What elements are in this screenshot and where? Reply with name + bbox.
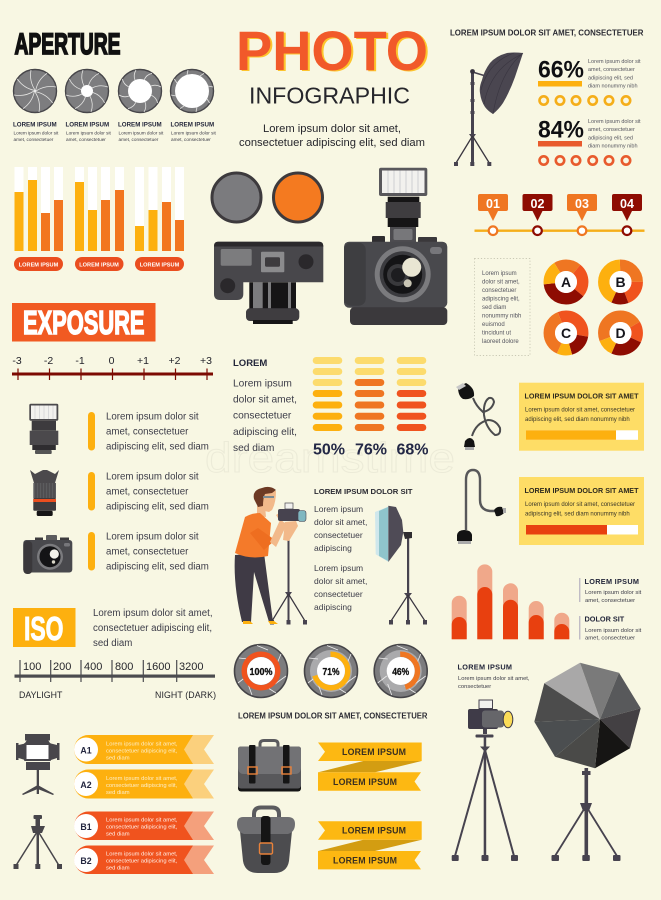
text: exposure item 1: Lorem ipsum dolor sit [106, 412, 199, 422]
text box: dotted: Lorem ipsum [482, 271, 517, 277]
text: photographer: consectetuer [314, 530, 363, 540]
aperture 2 [66, 70, 108, 112]
text: bottom right: consectetuer [458, 684, 491, 690]
text: lorem block: sed diam [233, 443, 274, 454]
aperture captions [13, 122, 217, 142]
text: photographer: LOREM IPSUM DOLOR SIT [314, 487, 413, 496]
tripod [270, 522, 307, 624]
stat: 84 percent [538, 116, 641, 165]
text: exposure item 3: amet, consectetuer [106, 546, 189, 558]
ribbon 1: LOREM IPSUM [342, 747, 406, 757]
text box: dotted: adipiscing elit, [482, 296, 520, 302]
bar chart labels: LOREM IPSUM [19, 262, 59, 268]
text: photographer: dolor sit amet, [314, 576, 367, 586]
icon: camera front view with flash [344, 168, 447, 325]
option A1: Lorem ipsum dolor sit amet, [106, 742, 178, 748]
stat: 84 percent: Lorem ipsum dolor sit [588, 119, 641, 125]
text: exposure item 3 [88, 532, 209, 572]
text: exposure item 2: Lorem ipsum dolor sit [106, 472, 199, 482]
stat: 66 percent: adipiscing elit, sed [588, 76, 633, 82]
stat: 84 percent: amet, consectetuer [588, 127, 635, 133]
card: yellow 1: LOREM IPSUM DOLOR SIT AMET [524, 392, 639, 400]
gauge 100 percent [234, 644, 288, 698]
card: yellow 2: adipiscing elit, sed diam nonummy nibh [525, 512, 630, 518]
donut chart B: B [615, 274, 626, 290]
text box: dotted: dolor sit amet, [482, 280, 520, 286]
donut chart C [549, 316, 583, 350]
pin 01: 01 [486, 197, 500, 211]
legend: columns: amet, consectetuer [585, 636, 635, 642]
exposure scale: -1 [75, 355, 85, 367]
text: lorem block: adipiscing elit, [233, 427, 297, 438]
ribbon 2: LOREM IPSUM [333, 856, 397, 866]
icon: small camera [23, 535, 72, 574]
camera [285, 503, 293, 509]
aperture 4 [170, 70, 214, 112]
bar chart: rounded columns [452, 564, 569, 639]
intro text [239, 123, 425, 149]
legend: columns: Lorem ipsum dolor sit [585, 590, 642, 596]
icon: softbox on stand [375, 506, 427, 624]
donut chart D: D [615, 325, 626, 341]
option A1: consectetuer adipiscing elit, [106, 748, 178, 754]
text box: dotted: tincidunt ut [482, 331, 511, 337]
stat: 66 percent [538, 56, 641, 105]
icon: orange filter [274, 173, 322, 222]
option B2: B2 [80, 856, 92, 866]
stat: 66 percent: 66% [538, 56, 584, 84]
pin 04 [612, 194, 642, 235]
ISO scale: 3200 [179, 661, 203, 673]
title: photo: PHOTO [238, 20, 430, 83]
stacked pill chart: 50% [313, 442, 345, 458]
icon: flash unit [29, 404, 58, 454]
legend: columns: Lorem ipsum dolor sit [585, 628, 642, 634]
text box: dotted [474, 258, 530, 356]
text: photographer: Lorem ipsum [314, 563, 363, 573]
text: lorem block [233, 358, 297, 454]
option A1: sed diam [106, 756, 130, 762]
icon: octagon softbox on stand [534, 663, 641, 861]
icon: umbrella light stand [454, 52, 523, 166]
rating rings: red [540, 156, 630, 165]
bar chart labels: LOREM IPSUM [140, 262, 180, 268]
text: photographer: dolor sit amet, [314, 517, 367, 527]
pin 02 [522, 194, 552, 235]
legend: columns: LOREM IPSUM [584, 577, 639, 586]
card: yellow 2 [519, 477, 644, 545]
ISO scale: 400 [84, 661, 102, 673]
text: exposure item 2: adipiscing elit, sed diam [106, 502, 209, 512]
subtitle: infographic: INFOGRAPHIC [249, 82, 410, 108]
option A2: consectetuer adipiscing elit, [106, 783, 178, 789]
exposure scale: -2 [44, 355, 53, 367]
text: photographer: adipiscing [314, 543, 352, 553]
donut chart A: A [561, 274, 571, 290]
donut chart B [604, 265, 637, 299]
aperture captions: Lorem ipsum dolor sit [118, 130, 164, 136]
text box: dotted: laoreet dolore [482, 339, 519, 345]
ISO text: Lorem ipsum dolor sit amet, [93, 608, 213, 619]
stacked pill chart [313, 357, 429, 458]
exposure scale: +3 [200, 355, 212, 367]
text: photographer [314, 487, 413, 612]
card: yellow 1: adipiscing elit, sed diam nonummy nibh [525, 417, 630, 423]
gauge 46 percent [374, 644, 427, 698]
text: lorem block: consectetuer [233, 410, 292, 422]
donut chart D [604, 316, 637, 350]
ISO text: sed diam [93, 638, 132, 649]
ISO scale: 200 [53, 661, 71, 673]
pin 04: 04 [620, 197, 634, 211]
gauge 46 percent: 46% [392, 666, 410, 678]
aperture captions: LOREM IPSUM [170, 122, 214, 128]
text: exposure item 2 [88, 472, 209, 512]
ribbon 2 [318, 821, 422, 869]
aperture captions: Lorem ipsum dolor sit [14, 130, 59, 136]
text box: dotted: consectetuer [482, 288, 516, 294]
option A2: Lorem ipsum dolor sit amet, [106, 776, 178, 782]
neck [257, 506, 266, 517]
bar chart: three groups [14, 167, 184, 271]
text: photographer: consectetuer [314, 589, 363, 599]
aperture captions: amet, consectetuer [14, 137, 54, 142]
option A1: A1 [80, 746, 92, 756]
stat: 84 percent: adipiscing elit, sed [588, 136, 633, 142]
pin 01 [478, 194, 508, 235]
ribbon 1: LOREM IPSUM [333, 777, 397, 787]
pin 02: 02 [531, 197, 544, 211]
aperture captions: amet, consectetuer [66, 137, 106, 142]
heading: right column: LOREM IPSUM DOLOR SIT AMET, CONSECTETUER [450, 28, 644, 38]
legend: columns [579, 577, 642, 642]
card: yellow 2: LOREM IPSUM DOLOR SIT AMET [524, 487, 639, 495]
exposure scale: +2 [169, 355, 181, 367]
icon: backpack [237, 808, 295, 873]
option A2: A2 [80, 780, 92, 790]
option B1: consectetuer adipiscing elit, [106, 824, 178, 830]
text: exposure item 1: adipiscing elit, sed diam [106, 442, 209, 452]
text: exposure item 1: amet, consectetuer [106, 426, 189, 438]
icon: studio light [16, 734, 60, 795]
exposure scale: 0 [109, 355, 115, 367]
aperture captions: LOREM IPSUM [66, 122, 109, 128]
exposure scale [12, 355, 213, 380]
stat: 84 percent: diam nonummy nibh [588, 144, 638, 150]
aperture captions: LOREM IPSUM [13, 122, 57, 128]
option A2 [74, 770, 214, 798]
icon: cable 2 [457, 470, 506, 544]
text: bottom right: Lorem ipsum dolor sit amet, [458, 676, 530, 682]
option B2: sed diam [106, 866, 130, 872]
text box: dotted: nonummy nibh [482, 314, 521, 320]
ribbon 1 [318, 742, 422, 791]
bar chart labels: LOREM IPSUM [79, 262, 119, 268]
option B2: consectetuer adipiscing elit, [106, 858, 178, 864]
card: yellow 1 [519, 383, 644, 451]
intro text: Lorem ipsum dolor sit amet, [263, 123, 401, 135]
option B2: Lorem ipsum dolor sit amet, [106, 852, 178, 858]
heading: aperture: APERTURE [14, 28, 120, 61]
icon: messenger bag [238, 740, 301, 792]
shirt [235, 513, 271, 557]
text: lorem block: LOREM [233, 358, 267, 369]
gauge 100 percent: 100% [250, 666, 273, 678]
heading: exposure [12, 303, 156, 342]
donut chart A [549, 265, 583, 299]
ribbon 2: LOREM IPSUM [342, 826, 406, 836]
hand [276, 511, 286, 523]
aperture 1 [14, 70, 56, 112]
text box: dotted: euismod [482, 322, 505, 328]
bar chart labels [14, 257, 184, 271]
watermark: dreamstime [205, 434, 455, 481]
rating rings: yellow [540, 96, 630, 105]
ISO scale: 100 [23, 661, 41, 673]
aperture diagrams [14, 70, 214, 112]
aperture 3 [118, 70, 162, 112]
pin 03 [567, 194, 597, 235]
pin 03: 03 [575, 197, 589, 211]
text: bottom right [458, 662, 530, 690]
intro text: consectetuer adipiscing elit, sed diam [239, 137, 425, 149]
option A1 [74, 735, 214, 764]
card: yellow 2: Lorem ipsum dolor sit amet, consectetuer [525, 502, 635, 508]
aperture captions: Lorem ipsum dolor sit [66, 130, 112, 136]
donut chart C: C [561, 325, 571, 341]
ISO scale [14, 660, 216, 700]
icon: grey filter [212, 173, 261, 222]
text: exposure item 3: Lorem ipsum dolor sit [106, 532, 199, 542]
head [260, 491, 276, 512]
option B2 [74, 846, 214, 874]
gauge caption: LOREM IPSUM DOLOR SIT AMET, CONSECTETUER [238, 712, 428, 720]
text: bottom right: LOREM IPSUM [458, 662, 512, 672]
ISO scale: NIGHT (DARK) [155, 690, 216, 700]
aperture captions: amet, consectetuer [171, 137, 211, 142]
icon: camera top view [214, 242, 323, 324]
heading: ISO: ISO [24, 610, 64, 647]
illustration: photographer at tripod [235, 487, 307, 624]
icon: camera on tripod [452, 700, 518, 861]
stat: 66 percent: diam nonummy nibh [588, 84, 638, 90]
text: photographer: Lorem ipsum [314, 504, 363, 514]
aperture captions: amet, consectetuer [118, 137, 159, 142]
icon: lens with hood [30, 470, 59, 516]
ISO scale: 800 [115, 661, 133, 673]
text: exposure item 1 [88, 412, 209, 452]
text: exposure item 2: amet, consectetuer [106, 486, 189, 498]
ISO scale: 1600 [146, 661, 170, 673]
sleeve [250, 528, 275, 550]
stacked pill chart: 68% [396, 442, 429, 458]
ISO scale: DAYLIGHT [19, 690, 63, 700]
stacked pill chart: 76% [355, 442, 387, 458]
trousers [235, 553, 273, 622]
text box: dotted: sed diam [482, 305, 506, 311]
option B1: Lorem ipsum dolor sit amet, [106, 818, 178, 824]
option A2: sed diam [106, 790, 130, 796]
exposure scale: -3 [12, 355, 22, 367]
exposure scale: +1 [137, 355, 149, 367]
text: photographer: adipiscing [314, 602, 352, 612]
icon: small tripod [14, 815, 62, 869]
heading: exposure: EXPOSURE [23, 304, 144, 341]
aperture captions: LOREM IPSUM [118, 122, 162, 128]
stat: 66 percent: amet, consectetuer [588, 67, 635, 73]
card: yellow 1: Lorem ipsum dolor sit amet, consectetuer [525, 408, 635, 414]
text: lorem block: Lorem ipsum [233, 378, 292, 390]
icon: cable 1 [456, 383, 500, 450]
forearms [270, 520, 287, 547]
option B1: sed diam [106, 832, 130, 838]
option B1 [74, 812, 214, 840]
gauge 71 percent [304, 644, 358, 698]
gauge 71 percent: 71% [322, 666, 340, 678]
ISO text: consectetuer adipiscing elit, [93, 623, 212, 634]
legend: columns: DOLOR SIT [584, 614, 625, 624]
stat: 84 percent: 84% [538, 116, 584, 144]
aperture captions: Lorem ipsum dolor sit [171, 130, 217, 136]
shoes [243, 621, 253, 624]
stat: 66 percent: Lorem ipsum dolor sit [588, 59, 641, 65]
ISO text [93, 608, 213, 649]
option B1: B1 [80, 822, 92, 832]
text: exposure item 3: adipiscing elit, sed diam [106, 562, 209, 572]
timeline [474, 194, 644, 235]
title: photo: PHOTO [236, 19, 428, 82]
text: lorem block: dolor sit amet, [233, 394, 297, 406]
legend: columns: amet, consectetuer [585, 598, 635, 604]
